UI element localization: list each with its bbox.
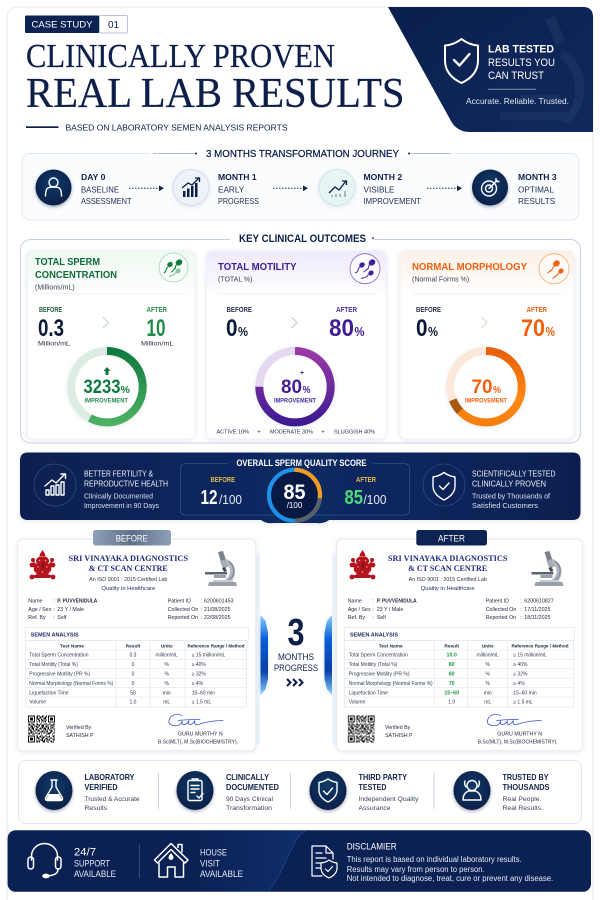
table: semen analysis: Normal Morphology (Normal Forms %): [29, 681, 114, 687]
after score: [344, 475, 387, 509]
card: normal morphology: (Normal Forms %): [412, 276, 469, 284]
breakdown legend: MODERATE 30%: [270, 429, 313, 435]
badge: third party tested: THIRD PARTY: [358, 773, 407, 782]
card: total sperm concentration: Million/mL: [141, 340, 174, 348]
table: semen analysis: 60: [449, 672, 455, 678]
card: total sperm concentration: (Millions/mL): [35, 284, 75, 292]
breakdown legend: SLUGGISH 40%: [334, 429, 375, 435]
arrow: [273, 186, 308, 191]
patient details: :: [53, 607, 55, 613]
badge: trusted by thousands: TRUSTED BY: [502, 773, 549, 782]
title: REAL LAB RESULTS: [26, 71, 404, 117]
patient details: 23 Y / Male: [57, 607, 84, 613]
patient details: :: [520, 615, 522, 621]
patient details: P. PUVVENIDULA: [57, 598, 97, 604]
patient details: Reported On: [486, 615, 516, 621]
lab name: SRI VINAYAKA DIAGNOSTICS: [388, 554, 508, 563]
patient details: :: [53, 598, 55, 604]
breakdown legend: [216, 429, 375, 435]
card: total motility: %: [354, 324, 365, 339]
icon: headset: [28, 844, 61, 878]
table: semen analysis: %: [164, 672, 169, 678]
table: semen analysis: 0: [132, 662, 135, 668]
header badge: case study: CASE STUDY: [32, 20, 93, 31]
card: total sperm concentration: TOTAL SPERM: [35, 256, 100, 268]
card: normal morphology: BEFORE: [416, 305, 441, 314]
verified by: [66, 725, 94, 739]
arrow: [129, 186, 164, 191]
icon: microscope: [532, 551, 564, 586]
step: month 3: OPTIMAL: [518, 185, 554, 194]
patient details: Age / Sex: [28, 607, 52, 613]
verified by: SATHISH P: [66, 733, 94, 739]
panel: 3 months transformation journey: [22, 148, 579, 220]
card: total motility: TOTAL MOTILITY: [218, 261, 296, 273]
signatory: [158, 732, 238, 745]
table: semen analysis: 1.0: [448, 700, 455, 706]
signatory: B.Sc(MLT), M.Sc(BIOCHEMISTRY).: [158, 739, 238, 745]
table: semen analysis: ≥ 4%: [513, 681, 525, 687]
badge: trusted by thousands: [454, 771, 550, 812]
step: month 3: RESULTS: [518, 197, 556, 206]
qr code: [28, 716, 55, 742]
table: semen analysis: mL: [163, 700, 170, 706]
table: semen analysis: 70: [449, 681, 455, 687]
step: month 3: MONTH 3: [518, 172, 557, 182]
patient details: Ref. By: [348, 615, 365, 621]
table: semen analysis: [344, 627, 575, 707]
right feature: Satisfied Customers: [472, 501, 538, 510]
table: semen analysis: Test Name: [60, 643, 84, 649]
icon: house: [154, 844, 188, 877]
badge: laboratory verified: VERIFIED: [84, 783, 118, 792]
verified by: [385, 725, 413, 739]
right feature: CLINICALLY PROVEN: [472, 480, 546, 488]
panel: footer band: [8, 830, 591, 892]
patient details: Self: [57, 615, 67, 621]
table: semen analysis: 15–60 min: [513, 690, 537, 696]
before score: 12: [200, 487, 218, 509]
icon: shield check: [445, 39, 478, 83]
lab name: Quality in Healthcare: [101, 586, 155, 592]
table: semen analysis: Result: [126, 643, 141, 649]
badge: clinically documented: 90 Days Clinical: [226, 796, 273, 803]
tag: [416, 530, 487, 546]
table: semen analysis: Units: [482, 643, 494, 649]
table: semen analysis: SEMEN ANALYSIS: [350, 633, 398, 639]
gauge: /100: [287, 501, 303, 510]
step: day 0: BASELINE: [81, 185, 120, 194]
lab name: An ISO 9001 : 2015 Certified Lab: [89, 577, 167, 583]
badge: third party tested: Assurance: [358, 805, 391, 812]
step: month 2: VISIBLE: [364, 185, 395, 194]
table: semen analysis: Total Motility (Total %): [349, 662, 398, 668]
house visit text: [200, 848, 243, 880]
patient details: 17/11/2025: [524, 607, 550, 613]
before score: BEFORE: [210, 475, 235, 484]
card: total sperm concentration: 0.3: [38, 315, 64, 342]
table: semen analysis: ≥ 32%: [192, 672, 206, 678]
table: semen analysis: million/mL: [476, 653, 499, 659]
card: total motility: %: [238, 324, 248, 339]
connector: 3 months progress: [260, 612, 332, 695]
card: normal morphology: 70: [521, 315, 545, 342]
patient details: :: [372, 615, 374, 621]
patient details: 23 Y / Male: [377, 607, 403, 613]
panel: lab tested badge: CAN TRUST: [488, 70, 544, 82]
ring chart: 3233%: %: [120, 384, 131, 396]
patient details: [348, 598, 554, 621]
breakdown legend: ACTIVE 10%: [216, 429, 249, 435]
ring chart: 3233%: [71, 351, 143, 422]
table: semen analysis: Liquefaction Time: [349, 690, 388, 696]
patient details: Name: [348, 598, 362, 604]
badge: laboratory verified: LABORATORY: [84, 773, 135, 782]
panel: lab tested badge: LAB TESTED: [488, 44, 554, 56]
table: semen analysis: min: [484, 690, 492, 696]
icon: sperm: [539, 254, 569, 284]
patient details: Self: [377, 615, 386, 621]
step: day 0: ASSESSMENT: [81, 197, 132, 206]
card: total motility: [206, 251, 386, 439]
table: semen analysis: 0: [132, 681, 135, 687]
support text: AVAILABLE: [74, 869, 116, 880]
badge: clinically documented: Transformation: [226, 805, 272, 812]
table: semen analysis: Volume: [29, 700, 46, 706]
right glow bracket: [324, 615, 332, 695]
patient details: 6200610827: [524, 598, 554, 604]
card: total motility: 80: [329, 315, 354, 342]
icon: sperm: [159, 253, 188, 282]
card: total sperm concentration: CONCENTRATION: [35, 269, 117, 281]
qr code: [348, 716, 375, 742]
header badge: case study: 01: [108, 20, 119, 31]
badge: laboratory verified: Trusted & Accurate: [84, 796, 140, 803]
card: normal morphology: %: [546, 324, 555, 339]
left feature: [34, 464, 168, 510]
table: semen analysis: %: [485, 681, 490, 687]
table: semen analysis: Normal Morphology (Normal Forms %): [349, 681, 433, 687]
lab name: Quality in Healthcare: [421, 586, 475, 592]
card: total sperm concentration: 10: [146, 315, 166, 342]
step: month 2: IMPROVEMENT: [364, 197, 421, 206]
heading: OVERALL SPERM QUALITY SCORE: [236, 458, 366, 469]
patient details: 18/11/2025: [524, 615, 550, 621]
lab name: An ISO 9001 : 2015 Certified Lab: [409, 577, 487, 583]
patient details: :: [53, 615, 55, 621]
faint microscope backdrop: [500, 16, 584, 124]
support text: SUPPORT: [74, 858, 110, 870]
card: normal morphology: NORMAL MORPHOLOGY: [412, 261, 527, 273]
card: total sperm concentration: AFTER: [146, 305, 168, 314]
right feature: [423, 464, 556, 510]
signatory: [478, 732, 558, 745]
arrow: [427, 186, 462, 191]
lab name: & CT SCAN CENTRE: [89, 564, 168, 573]
ring chart: 70%: 70: [472, 377, 492, 398]
ring chart: 80%: [259, 351, 331, 422]
before score: /100: [219, 493, 242, 507]
verified by: SATHISH P: [385, 733, 413, 739]
badge: third party tested: TESTED: [358, 783, 387, 792]
ring chart: 70%: %: [493, 384, 502, 396]
lab logo: [350, 550, 375, 579]
step: month 2: [319, 170, 421, 206]
tag: AFTER: [438, 533, 465, 544]
card: total motility: 0: [226, 315, 238, 342]
ring chart: 80%: %: [302, 384, 311, 396]
table: semen analysis: Test Name: [379, 643, 403, 649]
step: month 3: [472, 170, 557, 206]
table: semen analysis: Progressive Motility (PR %): [29, 672, 90, 678]
card: total motility: BEFORE: [226, 305, 252, 314]
card: total motility: (TOTAL %): [218, 276, 252, 284]
disclaimer: [347, 842, 553, 883]
header badge: case study: [25, 16, 128, 33]
after score: 85: [344, 487, 363, 509]
patient details: Age / Sex: [348, 607, 371, 613]
badge: clinically documented: [176, 771, 279, 812]
patient details: Patient ID: [486, 598, 509, 604]
heading: 3 MONTHS TRANSFORMATION JOURNEY: [206, 148, 399, 160]
patient details: Collected On: [486, 607, 516, 613]
patient details: :: [201, 607, 202, 613]
patient details: [28, 598, 234, 621]
title: CLINICALLY PROVEN: [26, 38, 335, 75]
lab name: SRI VINAYAKA DIAGNOSTICS: [69, 554, 189, 563]
lab name: & CT SCAN CENTRE: [408, 564, 487, 573]
panel: key clinical outcomes: [20, 233, 580, 443]
disclaimer: This report is based on individual laboratory results.: [347, 855, 522, 864]
right feature: Trusted by Thousands of: [472, 492, 550, 500]
right feature: SCIENTIFICALLY TESTED: [472, 469, 556, 478]
badge: clinically documented: CLINICALLY: [226, 773, 269, 782]
badge: trusted by thousands: THOUSANDS: [502, 783, 550, 792]
step: month 1: MONTH 1: [218, 172, 257, 182]
disclaimer: Not intended to diagnose, treat, cure or prevent any disease.: [347, 874, 553, 883]
step: day 0: [36, 170, 132, 206]
title: [26, 38, 404, 117]
left feature: BETTER FERTILITY &: [84, 469, 154, 478]
panel: overall sperm quality score: [20, 452, 580, 523]
disclaimer: DISCLAMIER: [347, 842, 397, 852]
badge: laboratory verified: [36, 771, 140, 812]
badge: third party tested: [310, 771, 419, 812]
panel: lab tested badge: Accurate. Reliable. Trusted.: [466, 96, 569, 106]
table: semen analysis: Total Motility (Total %): [29, 662, 78, 668]
before score: [200, 475, 242, 509]
table: semen analysis: Total Sperm Concentration: [349, 653, 408, 659]
chevrons: [287, 679, 302, 686]
badge: third party tested: Independent Quality: [358, 796, 419, 803]
connector: 3 months progress: 3: [288, 612, 304, 654]
ring chart: 70%: [450, 351, 522, 422]
table: semen analysis: 15–60: [444, 690, 459, 696]
table: semen analysis: Total Sperm Concentration: [29, 653, 89, 659]
connector: 3 months progress: PROGRESS: [274, 663, 318, 673]
table: semen analysis: Progressive Motility (PR %): [349, 672, 410, 678]
heading: KEY CLINICAL OUTCOMES: [239, 233, 366, 245]
patient details: Patient ID: [168, 598, 191, 604]
table: semen analysis: ≥ 40%: [192, 662, 206, 668]
icon: microscope: [205, 551, 237, 586]
step: month 2: MONTH 2: [364, 172, 402, 182]
patient details: 6200601453: [204, 598, 234, 604]
badge: laboratory verified: Results: [84, 805, 108, 812]
card: normal morphology: AFTER: [526, 305, 548, 314]
house visit text: HOUSE: [200, 848, 227, 858]
ring chart: 70%: IMPROVEMENT: [465, 398, 507, 404]
support text: 24/7: [74, 846, 96, 858]
table: semen analysis: Liquefaction Time: [29, 690, 69, 696]
badge: trusted by thousands: Real Results.: [502, 805, 543, 812]
patient details: Ref. By: [28, 615, 46, 621]
gauge: [269, 470, 320, 521]
table: semen analysis: ≥ 15 million/mL: [513, 653, 547, 659]
table: semen analysis: 10.0: [447, 653, 457, 659]
ring chart: 3233%: 3233: [84, 377, 120, 398]
patient details: 21/08/2025: [204, 607, 231, 613]
table: semen analysis: ≥ 4%: [192, 681, 204, 687]
table: semen analysis: 0: [132, 672, 135, 678]
panel: lab tested badge: [388, 7, 593, 132]
subtitle: BASED ON LABORATORY SEMEN ANALYSIS REPORTS: [66, 122, 288, 132]
step: month 1: EARLY: [218, 185, 245, 194]
patient details: 22/08/2025: [204, 615, 231, 621]
step: day 0: DAY 0: [81, 172, 106, 182]
left feature: Improvement in 90 Days: [84, 501, 159, 510]
patient details: :: [520, 607, 522, 613]
connector: 3 months progress: MONTHS: [278, 652, 314, 662]
patient details: :: [372, 598, 374, 604]
tag: [93, 530, 171, 546]
signatory: B.Sc(MLT), M.Sc(BIOCHEMISTRY).: [478, 739, 558, 745]
left glow bracket: [260, 615, 268, 695]
badge: trusted by thousands: Real People.: [502, 796, 542, 803]
table: semen analysis: ≥ 32%: [513, 672, 528, 678]
table: semen analysis: min: [163, 690, 171, 696]
patient details: :: [201, 615, 202, 621]
icon: sperm: [350, 254, 380, 284]
report: before: [18, 530, 260, 751]
table: semen analysis: 15–60 min: [192, 690, 215, 696]
table: semen analysis: %: [164, 662, 169, 668]
table: semen analysis: 80: [449, 662, 455, 668]
table: semen analysis: Volume: [349, 700, 366, 706]
step: month 1: [173, 170, 259, 206]
patient details: :: [372, 607, 374, 613]
after score: /100: [364, 493, 387, 507]
patient details: Name: [28, 598, 42, 604]
table: semen analysis: SEMEN ANALYSIS: [31, 633, 79, 639]
table: semen analysis: Reference Range / Method: [512, 643, 569, 649]
card: total sperm concentration: BEFORE: [39, 305, 62, 314]
report: after: [332, 530, 582, 751]
patient details: :: [201, 598, 202, 604]
gauge: 85: [284, 481, 306, 504]
ring chart: 80%: IMPROVEMENT: [274, 398, 316, 404]
step: month 1: PROGRESS: [218, 197, 259, 206]
card: normal morphology: [400, 251, 574, 439]
table: semen analysis: %: [485, 672, 490, 678]
icon: document shield: [312, 846, 337, 878]
support text: [74, 846, 116, 880]
table: semen analysis: ≥ 1.5 mL: [513, 700, 533, 706]
table: semen analysis: [25, 627, 248, 707]
table: semen analysis: 0.3: [130, 653, 137, 659]
table: semen analysis: mL: [484, 700, 491, 706]
ring chart: 80%: 80: [281, 377, 302, 398]
house visit text: AVAILABLE: [200, 869, 243, 880]
signature: [487, 714, 542, 726]
card: normal morphology: %: [428, 324, 438, 339]
table: semen analysis: 1.0: [130, 700, 137, 706]
panel: trust badges: [18, 760, 582, 824]
ring chart: 3233%: IMPROVEMENT: [84, 398, 128, 404]
left feature: Clinically Documented: [84, 492, 153, 500]
badge: clinically documented: DOCUMENTED: [226, 783, 279, 792]
left feature: REPRODUCTIVE HEALTH: [84, 480, 168, 488]
card: total motility: AFTER: [336, 305, 358, 314]
signature: [169, 714, 223, 726]
patient details: Reported On: [168, 615, 198, 621]
table: semen analysis: ≥ 1.5 mL: [192, 700, 211, 706]
lab logo: [30, 550, 55, 579]
signatory: GURU MURTHY N: [497, 732, 542, 738]
tag: BEFORE: [116, 533, 148, 544]
verified by: Verified By: [385, 725, 411, 731]
card: total sperm concentration: Million/mL: [38, 340, 70, 348]
signatory: GURU MURTHY N: [178, 732, 223, 738]
after score: AFTER: [356, 475, 376, 484]
patient details: P. PUVVENIDULA: [377, 598, 417, 604]
ring chart: 80%: +: [300, 370, 304, 377]
breakdown legend: +: [321, 429, 325, 435]
table: semen analysis: Units: [161, 643, 173, 649]
table: semen analysis: ≥ 15 million/mL: [192, 653, 226, 659]
lab name: [69, 554, 189, 592]
table: semen analysis: %: [164, 681, 169, 687]
card: total sperm concentration: [27, 251, 195, 439]
patient details: :: [520, 598, 522, 604]
table: semen analysis: ≥ 40%: [513, 662, 528, 668]
table: semen analysis: Reference Range / Method: [188, 643, 245, 649]
table: semen analysis: 50: [130, 690, 136, 696]
table: semen analysis: Result: [444, 643, 459, 649]
panel: lab tested badge: RESULTS YOU: [488, 57, 555, 69]
disclaimer: Results may vary from person to person.: [347, 865, 485, 874]
table: semen analysis: %: [485, 662, 490, 668]
breakdown legend: +: [257, 429, 261, 435]
verified by: Verified By: [66, 725, 92, 731]
house visit text: VISIT: [200, 858, 220, 870]
card: normal morphology: 0: [416, 315, 428, 342]
table: semen analysis: million/mL: [155, 653, 178, 659]
patient details: Collected On: [168, 607, 198, 613]
lab name: [388, 554, 508, 592]
